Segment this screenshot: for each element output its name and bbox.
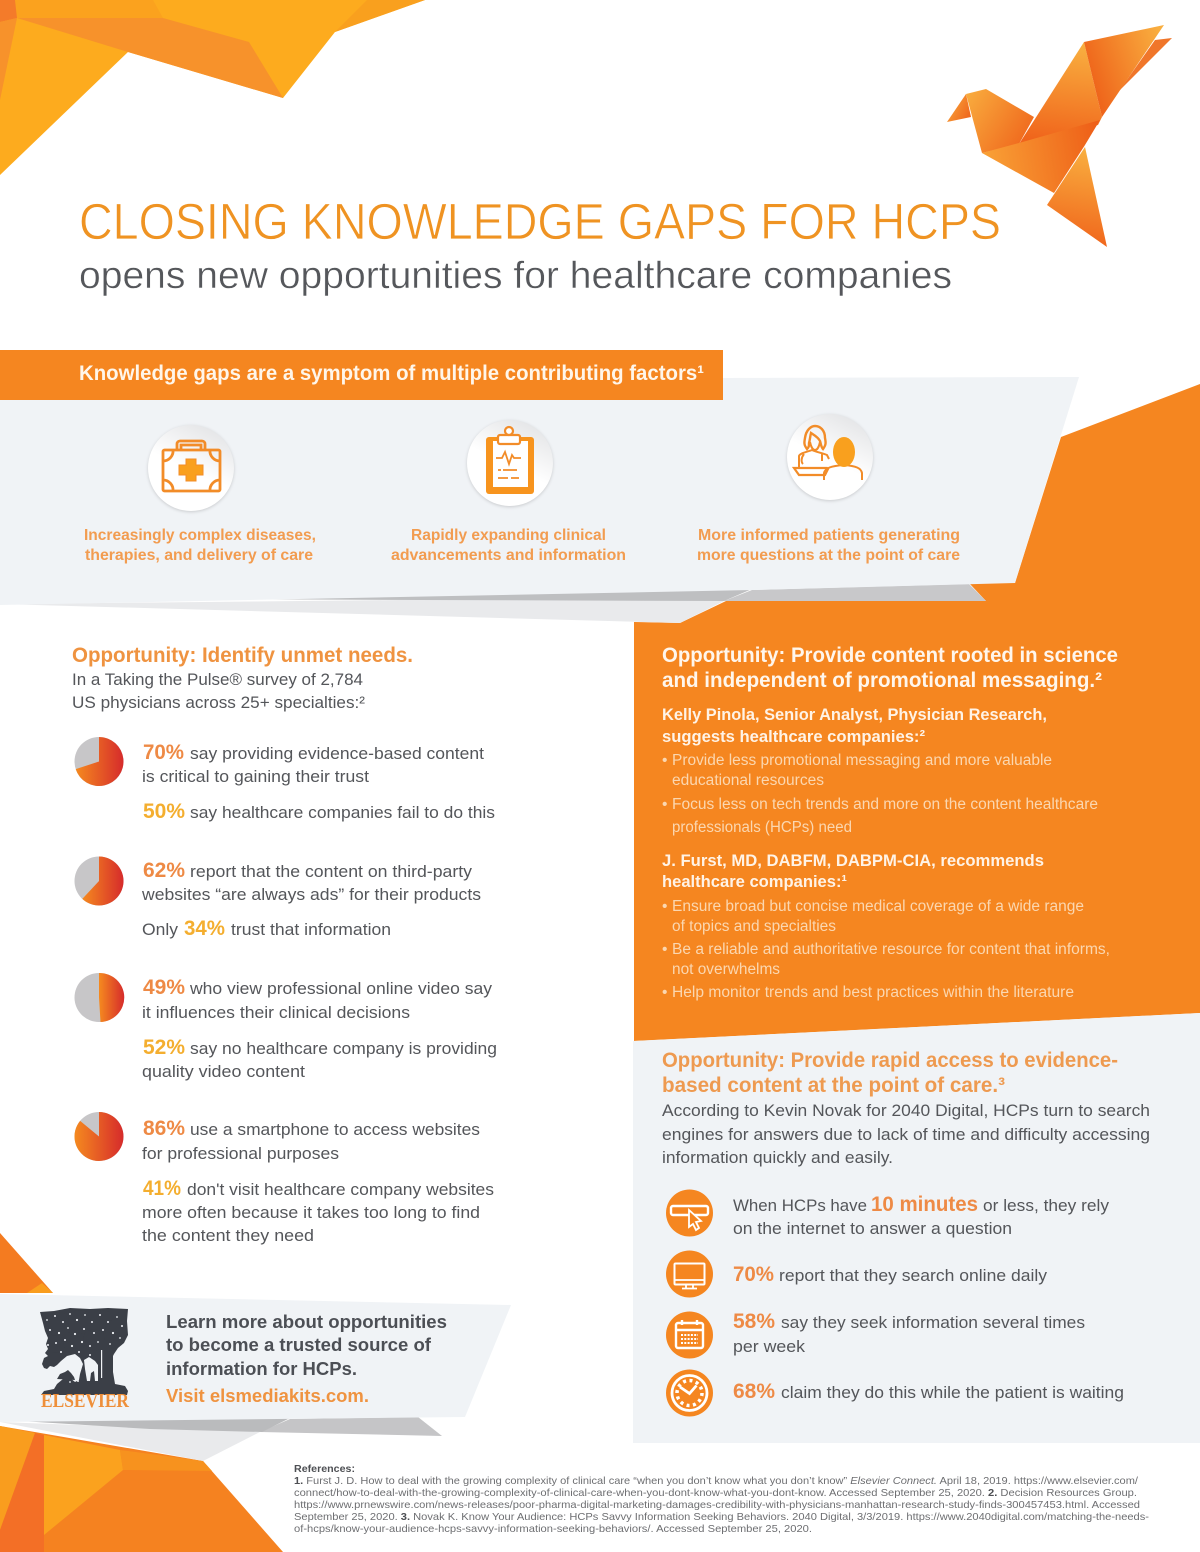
light shadow under call to action — [0, 1422, 260, 1461]
icon: clock — [666, 1370, 713, 1416]
pie chart: 70% — [74, 737, 124, 786]
pie chart: 86% — [74, 1112, 124, 1161]
Kelly Pinola recommendations: Provide less promotional messaging and more valuable — [672, 752, 1052, 769]
references: connect/how-to-deal-with-the-growing-complexity-of-clinical-care-when-you-dont-know-what-you-dont-know. Accessed September 25, 2020. 2. Decision Resources Group. — [294, 1487, 1137, 1499]
references: of-hcps/know-your-audience-hcps-savvy-information-seeking-behaviors/. Accessed September 25, 2020. — [294, 1523, 812, 1535]
stat: 68% while patient waits: claim they do this while the patient is waiting — [781, 1383, 1124, 1402]
logo: Elsevier tree — [40, 1308, 129, 1412]
stat: 70% and 50% — [142, 741, 495, 823]
intro paragraph: engines for answers due to lack of time and difficulty accessing — [662, 1125, 1150, 1144]
stat: 86% and 41%: more often because it takes too long to find — [142, 1203, 480, 1222]
heading: rapid access — [662, 1049, 1118, 1097]
factor caption 3: More informed patients generating — [698, 527, 960, 544]
references: 1. Furst J. D. How to deal with the growing complexity of clinical care “when you don’t know what you don’t know” Elsevier Connect. April 18, 2019. https://www.elsevier.com/ — [294, 1475, 1138, 1487]
Kelly Pinola recommendations: • — [662, 796, 667, 813]
panel: rapid access to content — [633, 1013, 1200, 1443]
survey intro — [72, 670, 365, 712]
heading: rapid access: based content at the point of care.³ — [662, 1074, 1005, 1097]
factor caption 2: advancements and information — [391, 547, 626, 564]
banner heading: Knowledge gaps are a symptom of multiple contributing factors¹ — [79, 362, 704, 385]
J. Furst recommendations: • — [662, 984, 667, 1001]
subtitle: opens new opportunities for healthcare companies — [79, 255, 952, 297]
stat: 68% while patient waits: 68% — [733, 1380, 775, 1403]
heading: provide content rooted in science: and independent of promotional messaging.² — [662, 669, 1102, 692]
stat: 49% and 52%: 52% — [143, 1036, 185, 1059]
Kelly Pinola recommendations — [662, 706, 1098, 836]
stat: 49% and 52%: say no healthcare company is providing — [190, 1039, 497, 1058]
heading: rapid access: Opportunity: Provide rapid access to evidence- — [662, 1049, 1118, 1072]
references — [294, 1463, 1150, 1535]
J. Furst recommendations: J. Furst, MD, DABFM, DABPM-CIA, recommends — [662, 852, 1044, 870]
factor caption 2 — [391, 527, 626, 564]
stat: 70% and 50%: 50% — [143, 800, 185, 823]
stat: 49% and 52%: who view professional online video say — [189, 979, 493, 998]
stat: 10 minutes: or less, they rely — [983, 1196, 1110, 1215]
stat: 86% and 41%: the content they need — [142, 1226, 314, 1245]
stat: 70% search daily: report that they search online daily — [779, 1266, 1048, 1285]
Kelly Pinola recommendations: • — [662, 752, 667, 769]
stat: 49% and 52%: it influences their clinical decisions — [142, 1003, 410, 1022]
icon: doctor and patient — [787, 414, 873, 501]
stat: 10 minutes: 10 minutes — [871, 1193, 978, 1216]
stat: 86% and 41%: for professional purposes — [142, 1144, 339, 1163]
stat: 70% and 50%: say healthcare companies fail to do this — [190, 803, 495, 822]
survey intro: In a Taking the Pulse® survey of 2,784 — [72, 670, 363, 689]
Kelly Pinola recommendations: professionals (HCPs) need — [672, 819, 852, 836]
stat: 70% search daily: 70% — [733, 1263, 774, 1286]
stat: 10 minutes — [733, 1193, 1110, 1238]
references: September 25, 2020. 3. Novak K. Know Your Audience: HCPs Savvy Information Seeking Behaviors. 2040 Digital, 3/3/2019. https://www.2040digital.com/matching-the-needs- — [294, 1511, 1150, 1523]
factor caption 1: therapies, and delivery of care — [85, 547, 313, 564]
stat: 86% and 41%: don't visit healthcare company websites — [187, 1180, 494, 1199]
factor caption 3 — [697, 527, 960, 564]
decorative orange triangle left — [0, 1233, 53, 1293]
Kelly Pinola recommendations: Focus less on tech trends and more on the content healthcare — [672, 796, 1098, 813]
intro paragraph: information quickly and easily. — [662, 1148, 893, 1167]
J. Furst recommendations: Be a reliable and authoritative resource for content that informs, — [672, 941, 1110, 958]
factor caption 1 — [84, 527, 316, 564]
call to action text: to become a trusted source of — [166, 1334, 432, 1355]
logo: Elsevier tree: ELSEVIER — [41, 1390, 129, 1412]
stat: 62% and 34%: 62% — [143, 859, 185, 882]
pie chart: 62% — [74, 856, 124, 906]
title: CLOSING KNOWLEDGE GAPS FOR HCPS — [79, 193, 1001, 250]
stat: 70% and 50%: is critical to gaining their trust — [142, 767, 369, 786]
references: https://www.prnewswire.com/news-releases/poor-pharma-digital-marketing-damages-credibility-with-physicians-manhattan-research-study-finds-300457453.html. Accessed — [294, 1499, 1140, 1511]
stat: 10 minutes: When HCPs have — [733, 1196, 867, 1215]
intro paragraph — [662, 1101, 1150, 1167]
J. Furst recommendations: healthcare companies:¹ — [662, 873, 847, 891]
stat: 70% and 50%: 70% — [143, 741, 184, 764]
light shadow under factors panel — [0, 600, 726, 623]
icon: origami bird — [947, 25, 1172, 247]
factor caption 1: Increasingly complex diseases, — [84, 527, 316, 544]
heading: identify unmet needs: Opportunity: Identify unmet needs. — [72, 644, 413, 667]
decorative origami shapes top left — [0, 0, 425, 175]
J. Furst recommendations: Help monitor trends and best practices within the literature — [672, 984, 1074, 1001]
orange background panel right — [634, 384, 1200, 1041]
icon: medical briefcase — [148, 425, 234, 512]
stat: 49% and 52%: quality video content — [142, 1062, 305, 1081]
stat: 70% and 50%: say providing evidence-based content — [190, 744, 484, 763]
stat: 49% and 52%: 49% — [143, 976, 185, 999]
J. Furst recommendations: not overwhelms — [672, 961, 780, 978]
J. Furst recommendations: • — [662, 898, 667, 915]
icon: monitor — [666, 1250, 713, 1298]
J. Furst recommendations: Ensure broad but concise medical coverage of a wide range — [672, 898, 1084, 915]
factor caption 3: more questions at the point of care — [697, 547, 960, 564]
call to action text: Learn more about opportunities — [166, 1311, 447, 1332]
decorative origami shapes bottom left — [0, 1426, 283, 1552]
panel: contributing factors — [0, 350, 1079, 605]
references: References: — [294, 1463, 355, 1475]
Kelly Pinola recommendations: educational resources — [672, 772, 824, 789]
icon: calendar — [666, 1312, 713, 1358]
survey intro: US physicians across 25+ specialties:² — [72, 693, 365, 712]
stat: 62% and 34%: report that the content on third-party — [190, 862, 473, 881]
stat: 58% seek information: per week — [733, 1337, 806, 1356]
call to action text — [166, 1311, 447, 1406]
stat: 58% seek information — [733, 1310, 1085, 1356]
Kelly Pinola recommendations: Kelly Pinola, Senior Analyst, Physician Research, — [662, 706, 1047, 724]
panel: science-rooted content — [662, 644, 1118, 1001]
stat: 62% and 34%: 34% — [184, 917, 225, 940]
banner heading — [0, 350, 723, 400]
icon: clipboard — [467, 420, 553, 507]
stat: 86% and 41%: use a smartphone to access websites — [190, 1120, 480, 1139]
stat: 86% and 41% — [142, 1117, 494, 1245]
stat: 70% search daily — [733, 1263, 1048, 1286]
panel: call to action — [0, 1294, 511, 1422]
J. Furst recommendations: • — [662, 941, 667, 958]
grey shadow under call to action — [20, 1417, 442, 1436]
call to action text: Visit elsmediakits.com. — [166, 1385, 369, 1406]
J. Furst recommendations: of topics and specialties — [672, 918, 836, 935]
stat: 10 minutes: on the internet to answer a question — [733, 1219, 1012, 1238]
stat: 62% and 34%: Only — [142, 920, 179, 939]
pie chart: 49% — [74, 973, 124, 1022]
stat: 62% and 34%: websites “are always ads” for their products — [141, 885, 481, 904]
stat: 58% seek information: 58% — [733, 1310, 775, 1333]
J. Furst recommendations — [662, 852, 1110, 1001]
heading: provide content rooted in science — [662, 644, 1118, 692]
stat: 62% and 34%: trust that information — [231, 920, 391, 939]
grey shadow under factors panel — [200, 584, 986, 601]
stat: 58% seek information: say they seek information several times — [781, 1313, 1085, 1332]
intro paragraph: According to Kevin Novak for 2040 Digital, HCPs turn to search — [662, 1101, 1150, 1120]
factor caption 2: Rapidly expanding clinical — [411, 527, 606, 544]
heading: provide content rooted in science: Opportunity: Provide content rooted in science — [662, 644, 1118, 667]
stat: 86% and 41%: 86% — [143, 1117, 185, 1140]
Kelly Pinola recommendations: suggests healthcare companies:² — [662, 728, 925, 746]
panel: identify unmet needs — [72, 644, 497, 1245]
stat: 86% and 41%: 41% — [143, 1177, 181, 1200]
icon: search bar and cursor — [666, 1190, 713, 1236]
stat: 62% and 34% — [141, 859, 481, 940]
stat: 49% and 52% — [142, 976, 497, 1081]
call to action text: information for HCPs. — [166, 1358, 357, 1379]
